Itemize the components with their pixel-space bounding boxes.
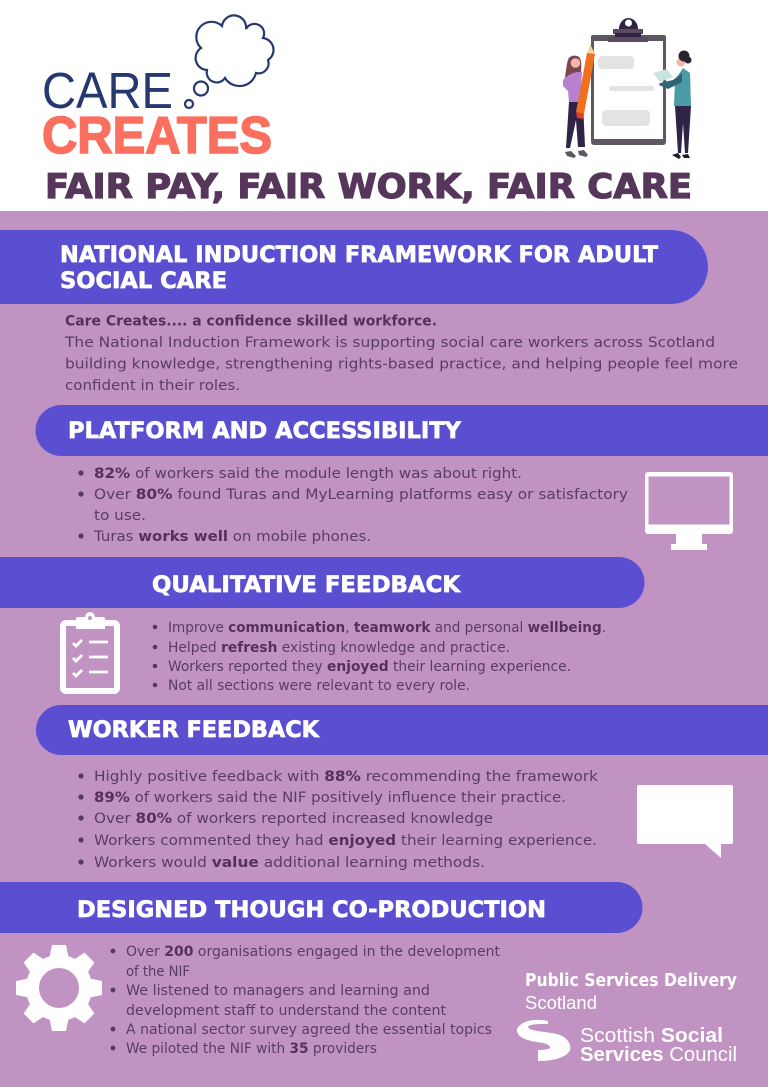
heading banner	[0, 882, 642, 933]
woman with pencil	[563, 45, 595, 158]
bullet list: Improve communication, teamwork and personal wellbeing.	[168, 620, 606, 636]
bullet list: We piloted the NIF with 35 providers	[126, 1041, 377, 1057]
bullet list: development staff to understand the content	[126, 1003, 446, 1019]
bullet list: Over 80% found Turas and MyLearning platforms easy or satisfactory	[94, 487, 628, 503]
bullet list: Over 80% of workers reported increased knowledge	[94, 811, 493, 827]
bullet list: We listened to managers and learning and	[126, 983, 430, 999]
panel: white header background	[0, 0, 768, 211]
clipboard placeholder lines	[598, 56, 634, 69]
man with notes	[653, 50, 692, 159]
icon: computer monitor	[645, 472, 733, 550]
logo swoosh	[517, 1020, 570, 1061]
bullet list: Highly positive feedback with 88% recommending the framework	[94, 769, 599, 785]
heading banner	[36, 405, 768, 456]
bullet list: Helped refresh existing knowledge and practice.	[168, 640, 510, 656]
heading text: NATIONAL INDUCTION FRAMEWORK FOR ADULT	[60, 242, 659, 268]
bullet list: to use.	[94, 508, 146, 524]
icon: gear	[16, 945, 102, 1031]
heading text: DESIGNED THOUGH CO-PRODUCTION	[77, 897, 546, 923]
heading text: WORKER FEEDBACK	[68, 717, 321, 743]
bullet list	[153, 620, 606, 694]
logos: Public Services Delivery Scotland and Scottish Social Services Council	[517, 971, 738, 1066]
icon: checklist clipboard	[63, 612, 117, 691]
intro text: Care Creates.... a confidence skilled workforce.	[65, 314, 437, 330]
clipboard board	[592, 36, 664, 144]
logo text: Public Services Delivery Scotland: Public Services Delivery	[525, 971, 738, 991]
bullet list: A national sector survey agreed the essential topics	[126, 1022, 492, 1038]
icon: speech bubble	[637, 785, 733, 858]
intro text: The National Induction Framework is supporting social care workers across Scotland	[64, 335, 715, 351]
logo text: Public Services Delivery Scotland: Scotland	[525, 993, 597, 1013]
intro text: building knowledge, strengthening rights-based practice, and helping people feel more	[65, 356, 738, 372]
title: FAIR PAY, FAIR WORK, FAIR CARE	[45, 167, 692, 207]
heading banner	[0, 557, 645, 608]
intro text: confident in their roles.	[65, 378, 240, 394]
panel: worker feedback	[36, 705, 768, 871]
heading banner	[0, 230, 708, 304]
logo: Care Creates	[42, 15, 274, 165]
intro text	[64, 314, 738, 394]
bullet list: Over 200 organisations engaged in the development	[126, 944, 500, 960]
bullet list: Not all sections were relevant to every role.	[168, 678, 470, 694]
bullet list: Workers would value additional learning methods.	[94, 855, 485, 871]
logo text: Scottish Social Services Council: Scottish Social	[580, 1025, 723, 1047]
bullet list	[78, 466, 628, 545]
logo text: Scottish Social Services Council	[580, 1025, 737, 1066]
panel: platform and accessibility	[36, 405, 768, 550]
icon: thought cloud	[185, 15, 274, 108]
heading banner	[36, 705, 768, 755]
heading text: QUALITATIVE FEEDBACK	[152, 572, 462, 598]
logo word: CARE: CARE	[42, 62, 173, 119]
logo text: Public Services Delivery Scotland	[525, 971, 738, 1013]
heading text: PLATFORM AND ACCESSIBILITY	[68, 418, 462, 444]
panel: national induction framework	[0, 230, 738, 394]
logo word: CREATES: CREATES	[42, 107, 272, 165]
panel: designed through co-production	[0, 882, 642, 1057]
bullet list: 89% of workers said the NIF positively influence their practice.	[94, 790, 566, 806]
bullet list: Workers commented they had enjoyed their learning experience.	[94, 833, 597, 849]
bullet list: of the NIF	[126, 964, 190, 980]
heading text	[60, 242, 659, 294]
bullet list: Workers reported they enjoyed their learning experience.	[168, 659, 571, 675]
bullet list: 82% of workers said the module length was about right.	[94, 466, 522, 482]
bullet list	[111, 944, 500, 1057]
panel: qualitative feedback	[0, 557, 645, 694]
bullet list: Turas works well on mobile phones.	[93, 529, 371, 545]
illustration: people with clipboard and pencil	[563, 18, 692, 159]
heading text: SOCIAL CARE	[60, 268, 227, 294]
logo text: Scottish Social Services Council: Services Council	[580, 1044, 737, 1066]
clipboard clip	[608, 18, 648, 42]
bullet list	[78, 769, 599, 871]
